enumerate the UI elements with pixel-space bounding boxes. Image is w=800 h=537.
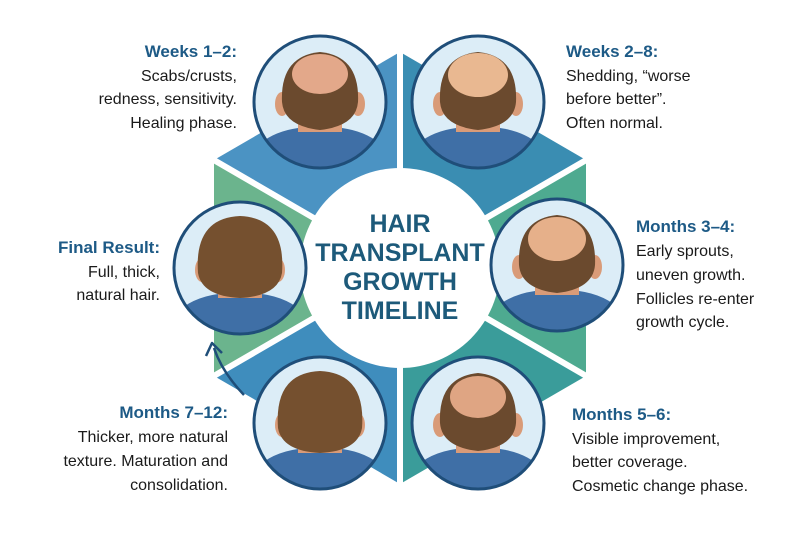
text: months 5-6: Visible improvement, <box>572 431 720 448</box>
head: months 3-4 <box>477 199 637 335</box>
text: months 3-4 <box>636 217 755 331</box>
text: months 3-4: Follicles re-enter <box>636 291 755 308</box>
text: months 5-6 <box>572 405 748 495</box>
head: weeks 1-2 <box>240 36 400 172</box>
text: months 5-6: Months 5–6: <box>572 405 671 424</box>
text: weeks 1-2: Healing phase. <box>130 115 237 132</box>
text: months 3-4: Months 3–4: <box>636 217 735 236</box>
text: weeks 2-8 <box>566 42 691 132</box>
text: months 7-12: texture. Maturation and <box>63 453 228 470</box>
text: weeks 1-2: Scabs/crusts, <box>141 68 237 85</box>
text: months 3-4: growth cycle. <box>636 314 729 331</box>
text: final result: Full, thick, <box>88 264 160 281</box>
head: months 5-6 <box>398 357 558 493</box>
ring <box>200 40 600 500</box>
text: months 7-12: Thicker, more natural <box>78 429 228 446</box>
arrow <box>206 343 244 395</box>
head: weeks 2-8 <box>398 36 558 172</box>
text: months 3-4: Early sprouts, <box>636 243 734 260</box>
head: months 7-12 <box>240 357 400 493</box>
title: TIMELINE <box>342 297 458 325</box>
text: weeks 2-8: Often normal. <box>566 115 663 132</box>
title: HAIR <box>369 210 431 238</box>
head: final <box>160 202 320 338</box>
title: GROWTH <box>343 268 457 296</box>
text: weeks 1-2: Weeks 1–2: <box>145 42 237 61</box>
text: weeks 1-2: redness, sensitivity. <box>99 91 237 108</box>
text: final result <box>58 238 160 304</box>
title: TRANSPLANT <box>315 239 485 267</box>
text: months 7-12: Months 7–12: <box>119 403 228 422</box>
text: months 5-6: Cosmetic change phase. <box>572 478 748 495</box>
text: final result: natural hair. <box>76 287 160 304</box>
text: months 3-4: uneven growth. <box>636 267 745 284</box>
text: weeks 2-8: before better”. <box>566 91 666 108</box>
title <box>315 210 485 325</box>
text: weeks 1-2 <box>99 42 237 132</box>
text: months 7-12: consolidation. <box>130 477 228 494</box>
text: months 5-6: better coverage. <box>572 454 688 471</box>
text: weeks 2-8: Weeks 2–8: <box>566 42 658 61</box>
text: weeks 2-8: Shedding, “worse <box>566 68 691 85</box>
text: months 7-12 <box>63 403 228 494</box>
text: final result: Final Result: <box>58 238 160 257</box>
